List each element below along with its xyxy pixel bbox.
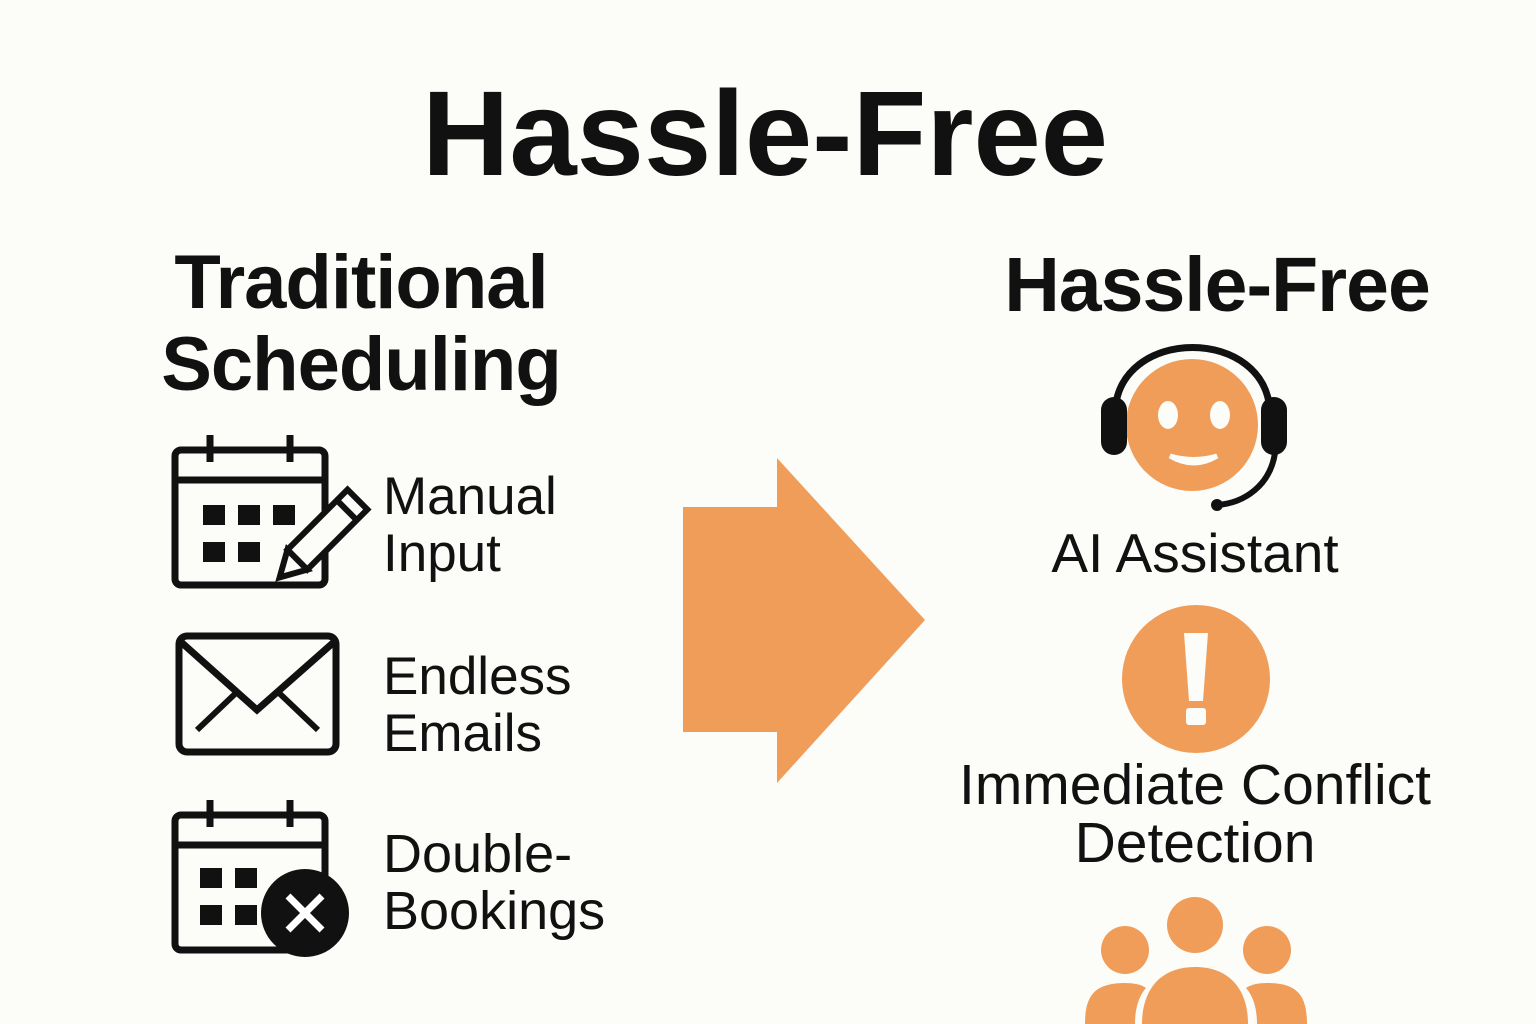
label: double-bookings <box>383 824 605 941</box>
heading: traditional scheduling <box>161 240 561 407</box>
title: Hassle-Free <box>422 65 1108 201</box>
label: immediate conflict detection: Immediate Conflict <box>959 753 1431 817</box>
label: AI assistant: AI Assistant <box>1051 522 1339 584</box>
label: manual input: Manual <box>383 467 557 526</box>
icon: calendar with pencil <box>172 435 372 588</box>
icon: AI assistant headset face <box>1101 344 1287 511</box>
label: double-bookings: Double- <box>383 824 572 884</box>
panel: traditional scheduling <box>161 240 605 957</box>
label: immediate conflict detection <box>959 753 1431 875</box>
icon: team group <box>1085 897 1307 1024</box>
heading: traditional scheduling: Traditional <box>174 240 548 325</box>
label: manual input: Input <box>383 524 501 583</box>
arrow <box>683 458 925 783</box>
label: endless emails <box>383 647 572 763</box>
icon: envelope <box>176 632 340 756</box>
label: endless emails: Emails <box>383 704 542 763</box>
heading: hassle-free: Hassle-Free <box>1004 242 1430 328</box>
heading: traditional scheduling: Scheduling <box>161 322 561 407</box>
label: manual input <box>383 467 557 583</box>
label: endless emails: Endless <box>383 647 572 706</box>
label: immediate conflict detection: Detection <box>1075 811 1315 875</box>
panel: hassle-free <box>959 242 1431 1024</box>
label: double-bookings: Bookings <box>383 881 605 941</box>
icon: calendar with x <box>172 800 349 957</box>
icon: conflict alert <box>1122 605 1270 753</box>
